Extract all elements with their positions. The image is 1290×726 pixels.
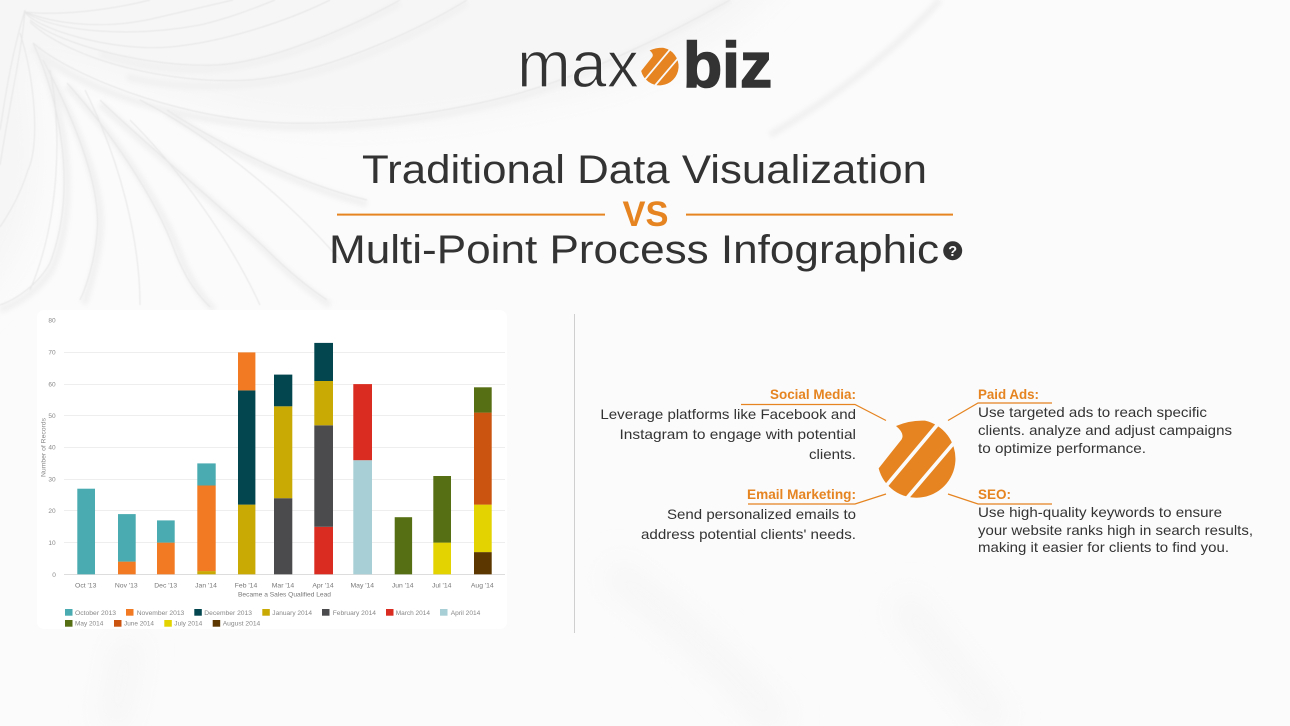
point: Email Marketing (641, 486, 886, 542)
x axis labels: Feb '14 (235, 582, 257, 590)
title line 1: Traditional Data Visualization (362, 148, 927, 192)
bar Nov 13 (118, 514, 136, 574)
point: Email Marketing: address potential clients' needs. (641, 526, 856, 542)
point: Social Media (600, 386, 886, 462)
chart card (37, 310, 507, 629)
bar Aug 14 (474, 387, 492, 574)
x axis title: Became a Sales Qualified Lead (238, 592, 331, 598)
title rule left (337, 214, 605, 216)
bar Jun 14 (395, 517, 412, 574)
x axis labels: Apr '14 (312, 582, 334, 590)
bar Apr 14 (314, 343, 333, 574)
stacked bars (77, 343, 492, 574)
legend: February 2014 (333, 610, 376, 617)
title line 2: Multi-Point Process Infographic (329, 228, 939, 272)
y axis labels: 80 (48, 318, 56, 324)
question mark icon: ? (948, 244, 957, 260)
x axis labels: Oct '13 (75, 582, 97, 590)
legend: December 2013 (204, 610, 252, 617)
panel: traditional stacked bar chart (37, 310, 507, 629)
legend: March 2014 (396, 610, 430, 617)
x axis labels (75, 582, 494, 590)
legend (65, 609, 481, 628)
x axis labels: Mar '14 (272, 582, 294, 590)
y axis labels: 20 (48, 508, 56, 515)
bar Oct 13 (77, 489, 95, 574)
y axis labels: 30 (48, 476, 56, 484)
point: Paid Ads: to optimize performance. (978, 440, 1146, 456)
y axis labels (48, 318, 56, 579)
point: Social Media: Leverage platforms like Facebook and (600, 406, 856, 422)
y axis labels: 60 (48, 382, 56, 388)
x axis labels: Jun '14 (392, 582, 414, 590)
point: Email Marketing: Email Marketing: (747, 486, 856, 502)
x axis labels: Aug '14 (471, 582, 494, 590)
bar Dec 13 (157, 520, 175, 574)
y axis title: Number of Records (40, 417, 48, 477)
legend: April 2014 (451, 610, 481, 617)
legend: November 2013 (137, 610, 185, 617)
point: Social Media: clients. (809, 446, 856, 462)
logo wordmark: biz: biz (683, 29, 772, 101)
logo emblem (641, 48, 679, 86)
bar Feb 14 (238, 352, 255, 574)
legend: January 2014 (272, 610, 312, 617)
legend: July 2014 (174, 621, 202, 628)
logo wordmark: max: max (517, 27, 639, 101)
point: Social Media: Instagram to engage with potential (620, 426, 856, 442)
bar Jul 14 (433, 476, 451, 574)
point: Paid Ads: Paid Ads: (978, 386, 1039, 402)
question mark icon (943, 241, 962, 260)
x axis labels: Jul '14 (432, 582, 452, 590)
y axis labels: 50 (48, 413, 56, 420)
bar May 14 (353, 384, 372, 574)
y axis labels: 40 (48, 444, 56, 452)
point: Paid Ads: Use targeted ads to reach specific (978, 404, 1207, 420)
bar Mar 14 (274, 375, 292, 574)
point: SEO: your website ranks high in search results, (978, 522, 1253, 538)
point: SEO: SEO: (978, 486, 1011, 502)
x axis labels: Nov '13 (115, 582, 138, 590)
bar Jan 14 (197, 463, 216, 574)
x axis labels: May '14 (351, 582, 374, 590)
point: SEO: Use high-quality keywords to ensure (978, 504, 1222, 520)
legend: October 2013 (75, 610, 116, 617)
title rule right (686, 214, 953, 216)
point: Email Marketing: Send personalized emails to (667, 506, 856, 522)
y axis labels: 70 (48, 350, 56, 356)
center emblem (879, 421, 955, 500)
point: SEO: making it easier for clients to find you. (978, 539, 1229, 555)
point: Paid Ads (948, 386, 1232, 456)
legend: May 2014 (75, 621, 103, 628)
y axis labels: 0 (52, 572, 56, 579)
logo: maxbiz (517, 27, 772, 101)
VS label: VS (622, 195, 668, 234)
panel: multi-point process infographic (600, 386, 1253, 555)
legend: August 2014 (223, 621, 261, 628)
point: Paid Ads: clients. analyze and adjust campaigns (978, 422, 1232, 438)
point: Social Media: Social Media: (770, 386, 856, 402)
point: SEO (948, 486, 1253, 555)
legend: June 2014 (124, 621, 154, 628)
y axis labels: 10 (48, 540, 56, 547)
vertical divider (574, 314, 575, 633)
x axis labels: Jan '14 (195, 582, 217, 590)
title block (329, 148, 962, 272)
x axis labels: Dec '13 (154, 582, 177, 590)
